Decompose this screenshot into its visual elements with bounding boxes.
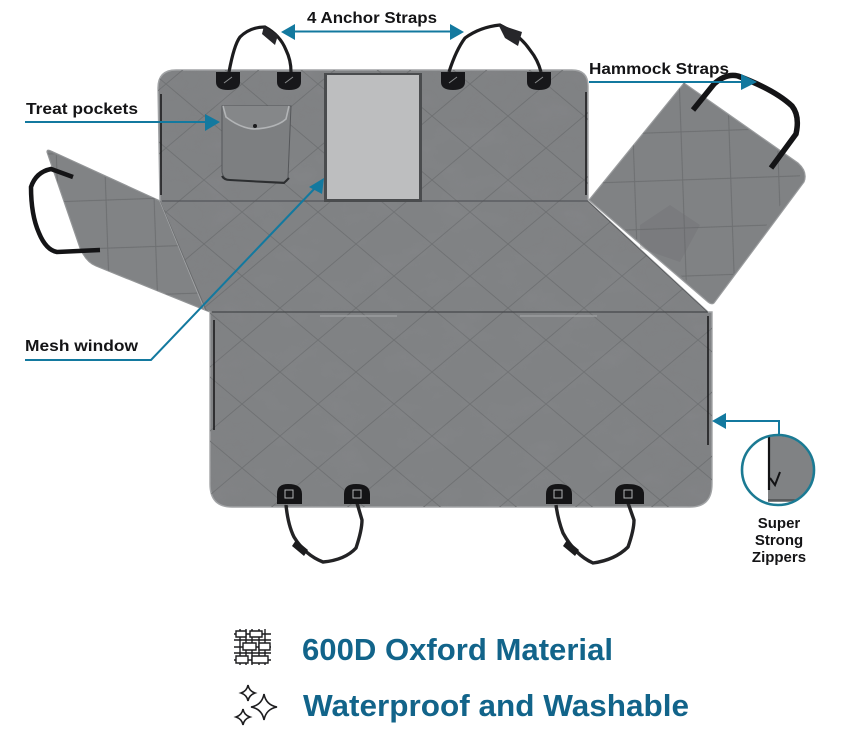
arrow: zippers	[712, 413, 779, 437]
anchors	[216, 72, 240, 90]
heading: Waterproof and Washable: Waterproof and Washable	[303, 688, 689, 723]
icon: woven fabric	[234, 629, 271, 665]
heading: 600D Oxford Material: 600D Oxford Material	[302, 632, 613, 667]
icon: sparkles	[236, 685, 277, 725]
label: Treat pockets: Treat pockets	[26, 101, 138, 118]
arrow: treat pockets	[25, 114, 220, 131]
arrow: hammock straps	[589, 74, 757, 90]
label: Hammock Straps: Hammock Straps	[589, 61, 729, 78]
zipper detail callout	[740, 434, 818, 506]
label: 4 Anchor Straps: 4 Anchor Straps	[307, 10, 437, 27]
buckles	[262, 26, 278, 45]
anchor straps: bottom	[277, 484, 644, 563]
treat pocket	[222, 106, 291, 183]
zippers	[161, 92, 708, 445]
label: Super Strong Zippers: Zippers	[752, 549, 806, 566]
arrow: anchor straps double arrow	[281, 24, 464, 40]
panel: main seat cover body	[150, 65, 720, 515]
label: Super Strong Zippers	[752, 515, 806, 566]
arrow: mesh window	[25, 178, 324, 360]
label: Super Strong Zippers: Strong	[755, 532, 803, 549]
panel: right side flap with hammock strap	[589, 75, 805, 304]
label: Super Strong Zippers: Super	[758, 515, 800, 532]
anchor straps: top	[216, 24, 551, 90]
label: Mesh window: Mesh window	[25, 338, 139, 355]
panel: left side flap	[31, 150, 205, 310]
strap: left flap handle	[31, 169, 100, 252]
strap: hammock handle	[693, 75, 797, 168]
mesh window	[324, 73, 422, 202]
